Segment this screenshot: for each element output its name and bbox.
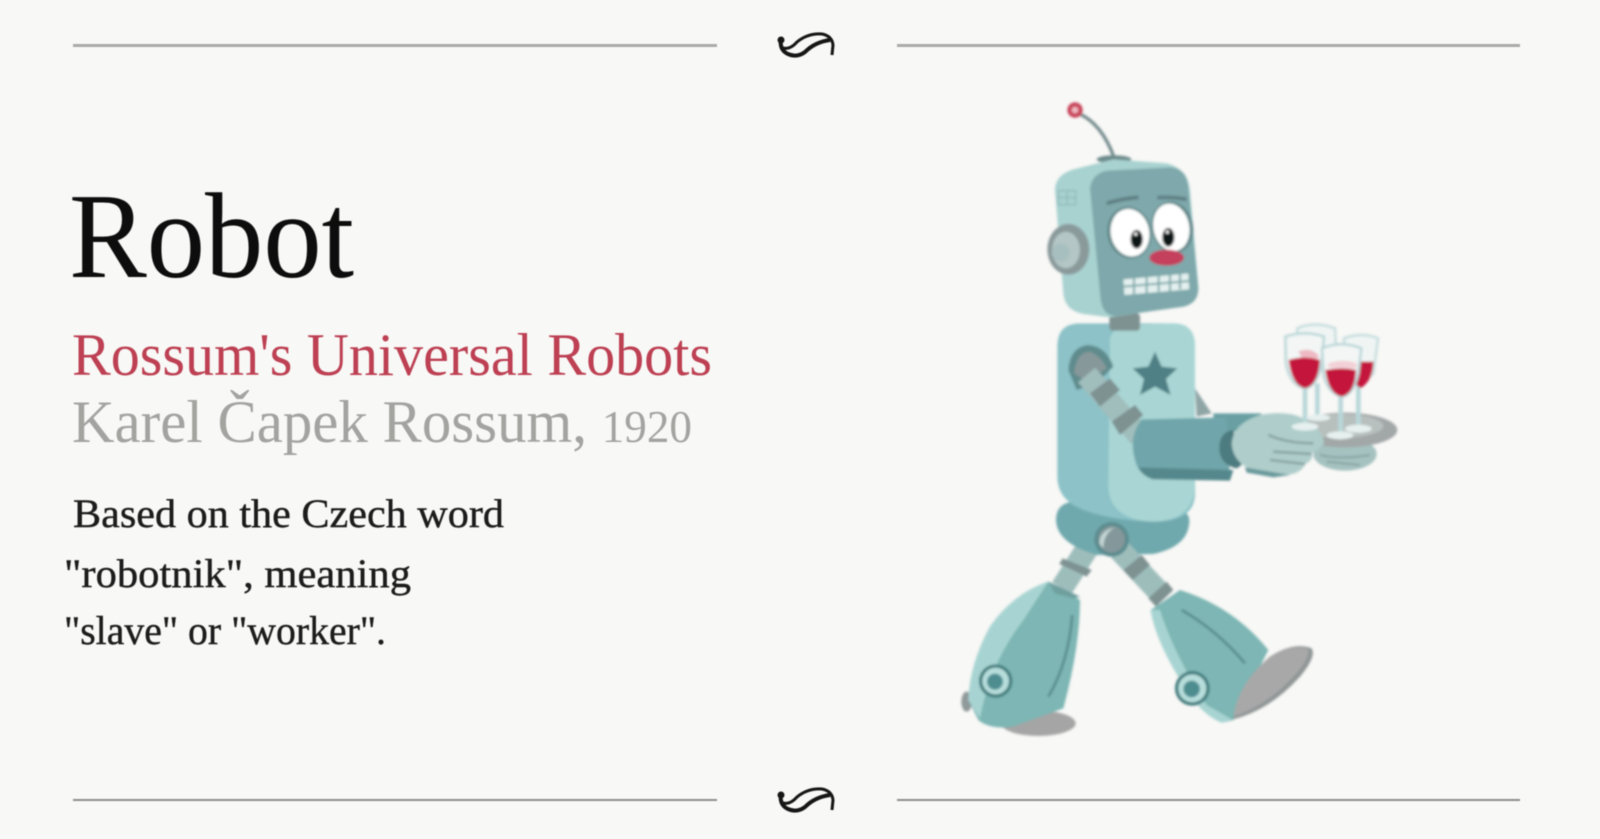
teeth	[1123, 273, 1189, 295]
eyes	[1102, 203, 1156, 263]
hip joint	[1094, 522, 1129, 557]
rear sole	[1001, 711, 1076, 736]
robot upper body	[1047, 102, 1378, 397]
top divider with ornament	[73, 34, 1520, 56]
head	[1047, 159, 1198, 317]
ear	[1047, 224, 1089, 275]
robot lower body	[961, 323, 1397, 736]
description text	[64, 491, 504, 653]
neck	[1109, 313, 1140, 331]
title: Robot: Robot	[69, 169, 354, 304]
wine glasses	[1285, 324, 1378, 397]
serving hand	[1232, 413, 1324, 477]
tray	[1293, 413, 1397, 471]
illustration: robot waiter	[961, 102, 1397, 736]
torso	[1057, 323, 1195, 522]
left boot	[968, 582, 1080, 727]
forearm	[1133, 413, 1262, 481]
far arm sliver	[1195, 388, 1212, 417]
nose	[1149, 250, 1184, 266]
author line: Karel Čapek Rossum, 1920	[72, 389, 692, 455]
description text: "robotnik", meaning	[64, 551, 411, 596]
eyebrows	[1107, 197, 1187, 203]
subtitle: Rossum's Universal Robots: Rossum's Universal Robots	[72, 322, 712, 388]
bottom divider with ornament	[73, 789, 1520, 811]
antenna	[1067, 102, 1131, 163]
left leg connector	[1059, 547, 1092, 588]
right boot	[1151, 590, 1313, 723]
description text: Based on the Czech word	[73, 491, 504, 536]
right leg connector	[1113, 543, 1173, 607]
wine glass bases	[1292, 383, 1372, 439]
hips	[1056, 502, 1189, 555]
description text: "slave" or "worker".	[64, 608, 386, 653]
near arm	[1068, 345, 1143, 437]
star emblem	[1133, 352, 1177, 395]
